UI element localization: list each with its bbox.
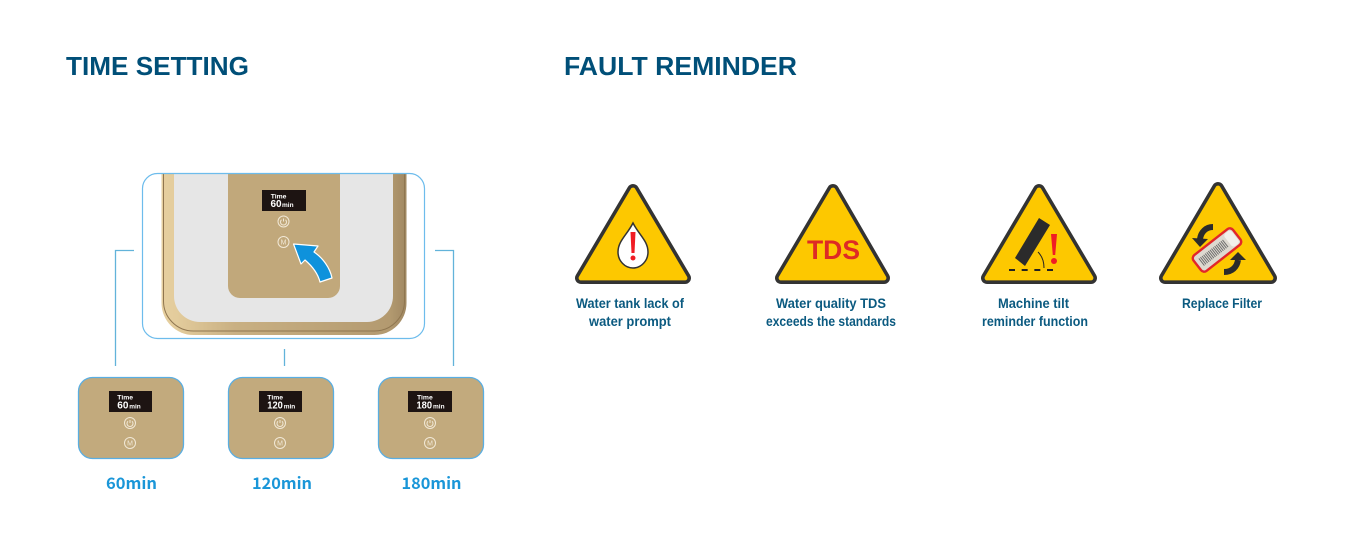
- caption: replace filter: Replace Filter: [1182, 295, 1262, 311]
- icon: mode button: M: [281, 240, 287, 246]
- icon: blue arrow: [294, 244, 332, 282]
- caption: TDS: exceeds the standards: [766, 313, 896, 329]
- panel: 180 minute setting: [378, 378, 484, 458]
- caption: machine tilt: reminder function: [982, 313, 1088, 329]
- panel: 180 minute setting: min: [433, 403, 445, 410]
- label: 120min: 120min: [252, 470, 312, 494]
- panel: 60 minute setting: Time: [117, 394, 133, 401]
- panel: 120 minute setting: M: [277, 440, 283, 448]
- caption: water tank: [576, 295, 684, 329]
- label: 180min: 180min: [402, 470, 462, 494]
- label: 60min: 60min: [106, 470, 157, 494]
- display: 60 min: Time: [271, 193, 287, 200]
- icon: power button: [278, 216, 289, 227]
- display: 60 min: min: [282, 202, 294, 209]
- panel: 180 minute setting: M: [427, 440, 433, 448]
- caption: TDS: [766, 295, 896, 329]
- device frame: [162, 174, 406, 335]
- panel: 120 minute setting: [228, 378, 334, 458]
- caption: machine tilt: Machine tilt: [998, 295, 1069, 311]
- icon: replace filter warning: [1165, 188, 1271, 278]
- icon: machine tilt warning: [987, 190, 1091, 278]
- caption: TDS: Water quality TDS: [776, 295, 886, 311]
- connector: right: [435, 250, 454, 366]
- display: 60 min: 60: [270, 199, 282, 210]
- panel: 180 minute setting: Time: [417, 394, 433, 401]
- icon: TDS warning: [781, 190, 884, 278]
- icon: TDS warning: TDS: [807, 235, 860, 265]
- panel: 60 minute setting: 60: [117, 400, 129, 411]
- display: 60 min: [262, 190, 306, 211]
- panel: main control close-up: [142, 172, 426, 340]
- panel: 120 minute setting: 120: [267, 400, 283, 411]
- connector: left: [116, 250, 134, 366]
- control plate: [228, 174, 340, 298]
- panel: 60 minute setting: [78, 378, 184, 458]
- caption: water tank: water prompt: [588, 313, 671, 329]
- panel: 120 minute setting: min: [284, 403, 295, 410]
- caption: water tank: Water tank lack of: [576, 295, 684, 311]
- icon: mode button: [278, 236, 289, 248]
- panel: 180 minute setting: 180: [416, 400, 432, 411]
- panel: 120 minute setting: Time: [267, 394, 283, 401]
- panel: 60 minute setting: min: [129, 403, 141, 410]
- connector: center: [284, 349, 286, 366]
- panel: 60 minute setting: M: [127, 440, 133, 448]
- heading: fault reminder: FAULT REMINDER: [564, 51, 797, 81]
- icon: water tank warning: [581, 190, 685, 278]
- heading: time setting: TIME SETTING: [66, 51, 249, 81]
- caption: machine tilt: [982, 295, 1088, 329]
